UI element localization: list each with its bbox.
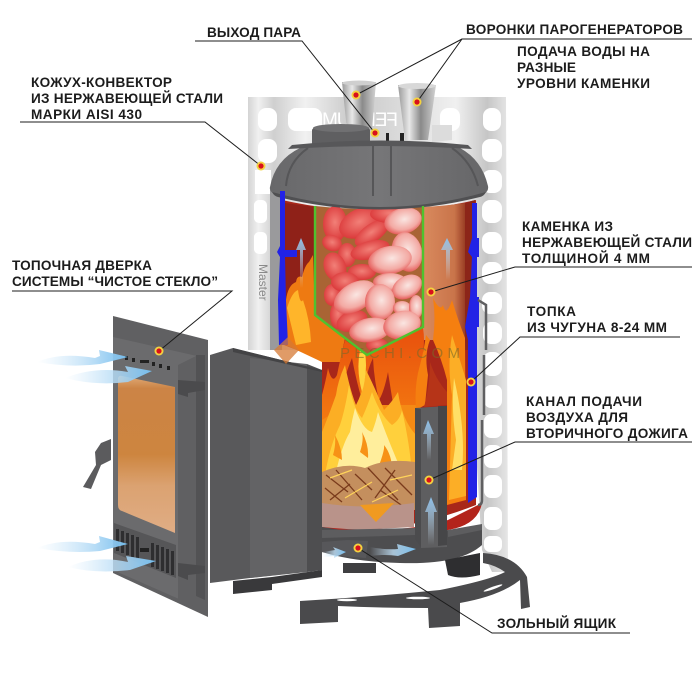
- green stone basket outline: [315, 206, 423, 355]
- left chamber: [285, 203, 315, 350]
- firebox door: [83, 316, 208, 617]
- mirrored brand text on shroud back: Master: [256, 264, 270, 301]
- label: stone chamber: НЕРЖАВЕЮЩЕЙ СТАЛИ: [522, 235, 692, 250]
- air arrows under firebox: [323, 544, 416, 558]
- label: steam generator funnels: ВОРОНКИ ПАРОГЕНЕРАТОРОВ: [466, 22, 683, 37]
- steam outlet collar: [312, 124, 404, 146]
- secondary air channel: [415, 406, 447, 548]
- callout marker dots: [154, 90, 476, 552]
- label: air channel: [526, 394, 688, 441]
- label: air channel: КАНАЛ ПОДАЧИ: [526, 394, 642, 409]
- blue air arrows at door: [37, 350, 156, 571]
- watermark: PECHI.COM: [340, 345, 460, 362]
- label: firebox door: СИСТЕМЫ “ЧИСТОЕ СТЕКЛО”: [12, 274, 218, 289]
- right outer cast-iron bars: [478, 300, 486, 505]
- up arrow left chamber: [296, 238, 306, 288]
- left blue wall channel: [277, 191, 297, 345]
- mirrored brand text on shroud back: [256, 110, 398, 301]
- label: stone chamber: ТОЛЩИНОЙ 4 ММ: [522, 251, 650, 266]
- label: firebox door: ТОПОЧНАЯ ДВЕРКА: [12, 258, 152, 273]
- firebox door extension: [210, 337, 322, 594]
- label: firebox: ТОПКА: [527, 304, 576, 319]
- steam generator funnel right: [398, 83, 452, 142]
- firebox interior background: [282, 200, 476, 531]
- label: shroud: МАРКИ AISI 430: [31, 107, 142, 122]
- label: ash box: ЗОЛЬНЫЙ ЯЩИК: [497, 616, 617, 631]
- label: firebox: [527, 304, 667, 335]
- base ring with feet: [300, 553, 530, 628]
- label: stone chamber: [522, 219, 692, 266]
- arrow in channel bottom: [425, 497, 437, 545]
- right chamber tan wall: [423, 203, 465, 340]
- label: shroud: ИЗ НЕРЖАВЕЮЩЕЙ СТАЛИ: [31, 91, 223, 106]
- door air slots: [125, 356, 170, 370]
- door hinges: [178, 380, 205, 580]
- label: water supply: РАЗНЫЕ: [517, 60, 576, 75]
- right blue wall channel: [465, 203, 479, 503]
- flames in left chamber: [286, 255, 345, 362]
- up arrow right chamber: [441, 238, 453, 280]
- label: water supply: [517, 44, 650, 91]
- mirrored brand text on shroud back: FERRUM: [322, 110, 398, 131]
- stove base plate and ash pit: [322, 524, 482, 578]
- label: shroud: [31, 75, 223, 122]
- dome lid: [270, 140, 488, 210]
- burning logs: [322, 461, 415, 532]
- label: water supply: ПОДАЧА ВОДЫ НА: [517, 44, 650, 59]
- door glass: [118, 376, 175, 533]
- label: stone chamber: КАМЕНКА ИЗ: [522, 219, 613, 234]
- label: shroud: КОЖУХ-КОНВЕКТОР: [31, 75, 172, 90]
- red firebox floor: [322, 503, 482, 535]
- label: steam outlet: ВЫХОД ПАРА: [207, 25, 301, 40]
- label: air channel: ВОЗДУХА ДЛЯ: [526, 410, 628, 425]
- door lower grille: [114, 523, 176, 578]
- arrow in channel top: [423, 420, 434, 460]
- steam generator funnel left: [342, 80, 376, 130]
- shroud side shading: [270, 190, 282, 350]
- stainless steel convector shroud: [248, 97, 508, 572]
- label: firebox: ИЗ ЧУГУНА 8-24 ММ: [527, 320, 667, 335]
- main fire: [322, 298, 466, 505]
- stone basket with stones: [315, 201, 427, 355]
- label: firebox door: [12, 258, 218, 289]
- label: air channel: ВТОРИЧНОГО ДОЖИГА: [526, 426, 688, 441]
- door handle: [83, 439, 111, 489]
- label: water supply: УРОВНИ КАМЕНКИ: [517, 76, 650, 91]
